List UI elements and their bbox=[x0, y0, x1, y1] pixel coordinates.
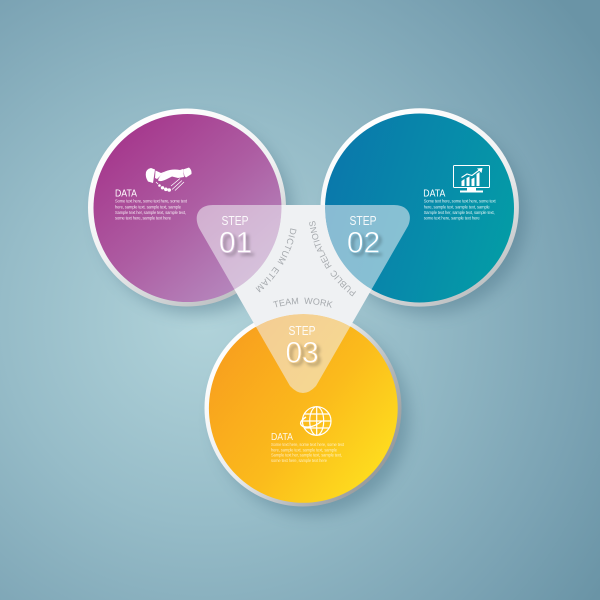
text block: purple data: Some text here, some text here, some text bbox=[115, 199, 188, 204]
step 03 label: STEP bbox=[288, 324, 316, 338]
text block: purple data: DATA bbox=[115, 189, 137, 200]
panel: yellow circle bbox=[204, 310, 402, 506]
icon: monitor with chart bbox=[453, 165, 490, 192]
translucent triangle overlay bbox=[197, 205, 410, 393]
curved label: team work: TEAM WORK bbox=[273, 298, 333, 308]
step 02 label: STEP bbox=[350, 214, 376, 228]
icon: handshake bbox=[146, 168, 192, 192]
text block: teal data: Sample text her, sample text, sample text, bbox=[424, 210, 495, 215]
text block: purple data bbox=[115, 189, 188, 220]
text block: purple data: Sample text her, sample text, sample text, bbox=[115, 210, 186, 215]
text block: teal data: some text here, sample text here bbox=[424, 216, 480, 220]
central triangle opaque area bbox=[234, 205, 372, 327]
icon: globe bbox=[301, 407, 331, 435]
text block: teal data: Some text here, some text here, some text bbox=[424, 199, 497, 204]
panel: teal circle bbox=[320, 108, 519, 307]
text block: yellow data: Some text here, some text here, some text bbox=[271, 442, 345, 447]
text block: purple data: here, sample text. sample text, sample bbox=[115, 204, 182, 210]
text block: yellow data: here, sample text. sample text, sample bbox=[271, 447, 338, 452]
text block: yellow data bbox=[271, 432, 345, 463]
circle shadows bbox=[99, 120, 526, 515]
text block: yellow data: Sample text her, sample text, sample text, bbox=[271, 453, 342, 458]
text block: yellow data: some text here, sample text here bbox=[271, 458, 328, 463]
step 03 label: 03 bbox=[285, 336, 319, 370]
step 02 label: 02 bbox=[347, 226, 380, 260]
text block: purple data: some text here, sample text here bbox=[115, 216, 172, 220]
text block: teal data: here, sample text. sample text, sample bbox=[424, 204, 490, 210]
text block: teal data: DATA bbox=[423, 189, 446, 200]
curved label: dictum etiam: DICTUM ETIAM bbox=[256, 228, 296, 292]
text block: yellow data: DATA bbox=[271, 432, 293, 443]
step 01 label: STEP bbox=[222, 214, 248, 228]
curved label: public relations: PUBLIC RELATIONS bbox=[309, 221, 356, 296]
text block: teal data bbox=[423, 189, 497, 220]
step 01 label: 01 bbox=[219, 226, 252, 260]
panel: purple circle bbox=[88, 108, 286, 306]
